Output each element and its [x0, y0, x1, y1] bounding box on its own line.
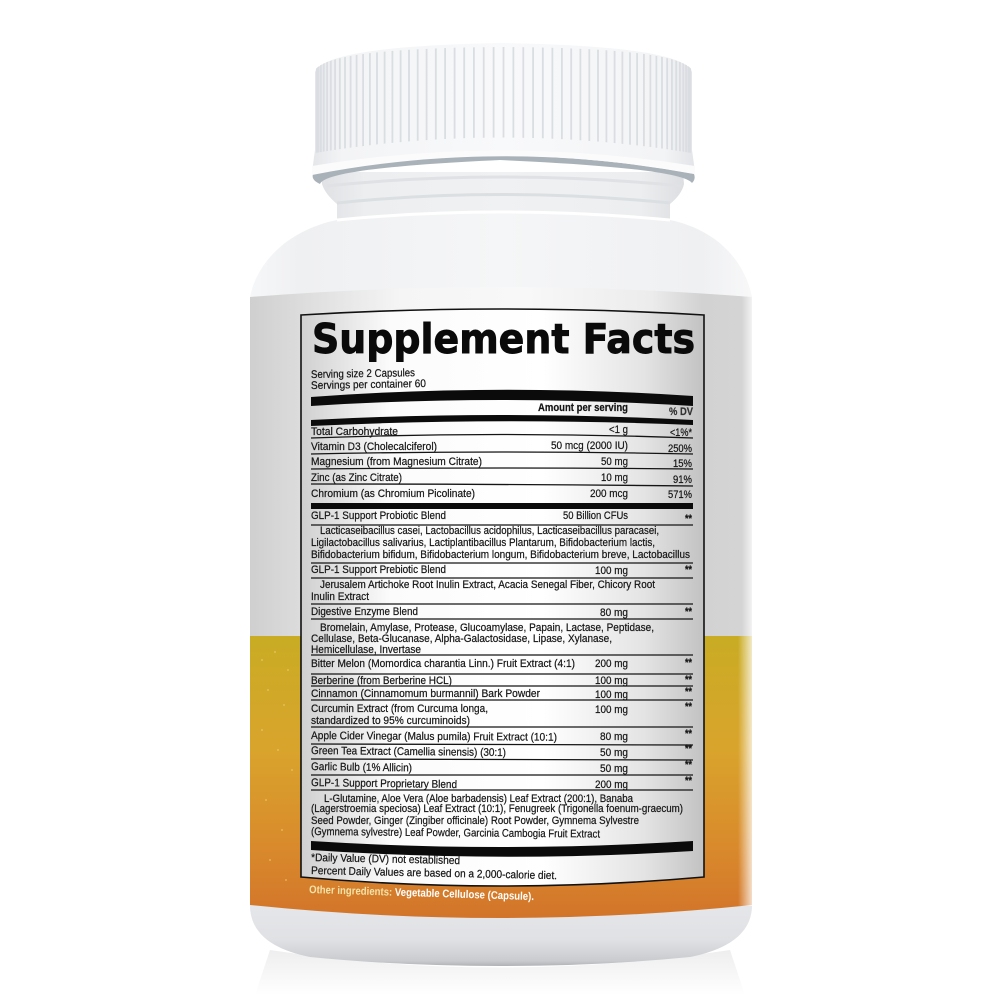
digestive enzyme blend: Cellulase, Beta-Glucanase, Alpha-Galactosidase, Lipase, Xylanase,: [311, 633, 612, 645]
cap lip shadow ring: [313, 156, 695, 184]
nutrient rows: 91%: [673, 474, 692, 486]
proprietary blend: (Lagerstroemia speciosa) Leaf Extract (10:1), Fenugreek (Trigonella foenum-graecum): [311, 803, 683, 815]
extract rows: Garlic Bulb (1% Allicin): [311, 761, 412, 774]
extract rows: Green Tea Extract (Camellia sinensis) (30:1): [311, 745, 506, 759]
footnotes: Percent Daily Values are based on a 2,000-calorie diet.: [311, 865, 557, 882]
nutrient rows: Vitamin D3 (Cholecalciferol): [311, 441, 437, 453]
probiotic blend: GLP-1 Support Probiotic Blend: [311, 510, 446, 522]
prebiotic blend: GLP-1 Support Prebiotic Blend: [311, 564, 446, 576]
reflection under bottle: [255, 950, 745, 995]
other ingredients note: Other ingredients: Vegetable Cellulose (Capsule).: [309, 884, 534, 903]
nutrient rows: [311, 424, 693, 501]
extract rows: 200 mg: [595, 658, 628, 670]
nutrient rows: Zinc (as Zinc Citrate): [311, 472, 402, 484]
extract rows: 100 mg: [595, 689, 628, 701]
thick rules and column headers: [311, 390, 694, 426]
label right edge highlight: [738, 636, 752, 906]
label background: [250, 287, 752, 918]
proprietary blend: (Gymnema sylvestre) Leaf Powder, Garcinia Cambogia Fruit Extract: [311, 826, 600, 841]
probiotic blend: **: [685, 513, 693, 525]
nutrient rows: 50 mcg (2000 IU): [551, 440, 628, 452]
nutrient rows: 571%: [668, 489, 692, 501]
probiotic blend: Lacticaseibacillus casei, Lactobacillus acidophilus, Lacticaseibacillus paracasei,: [320, 525, 659, 537]
extract rows: **: [685, 743, 693, 755]
decorative dots: [261, 651, 293, 881]
nutrient rows: <1 g: [609, 424, 628, 436]
extract rows: **: [685, 657, 693, 669]
bottle cap: [312, 40, 695, 184]
proprietary blend: 200 mg: [595, 779, 628, 791]
serving info: Servings per container 60: [311, 378, 426, 392]
prebiotic blend: Jerusalem Artichoke Root Inulin Extract, Acacia Senegal Fiber, Chicory Root: [320, 579, 655, 591]
probiotic blend: Ligilactobacillus salivarius, Lactiplantibacillus Plantarum, Bifidobacterium lactis,: [311, 537, 655, 549]
extract rows: Bitter Melon (Momordica charantia Linn.) Fruit Extract (4:1): [311, 658, 575, 670]
nutrient rows: Magnesium (from Magnesium Citrate): [311, 456, 482, 468]
extract rows: 50 mg: [600, 763, 628, 775]
nutrient rows: Total Carbohydrate: [311, 426, 398, 438]
digestive enzyme blend: Bromelain, Amylase, Protease, Glucoamylase, Papain, Lactase, Peptidase,: [320, 622, 654, 634]
extract rows: **: [685, 674, 693, 686]
nutrient rows: 250%: [668, 443, 692, 455]
nutrient rows: 50 mg: [601, 456, 628, 468]
extract rows: standardized to 95% curcuminoids): [311, 715, 470, 727]
thick rules and column headers: Amount per serving: [538, 402, 628, 414]
extract rows: Cinnamon (Cinnamomum burmannil) Bark Powder: [311, 688, 540, 700]
proprietary blend: [311, 775, 693, 841]
proprietary blend: Seed Powder, Ginger (Zingiber officinale) Root Powder, Gymnema Sylvestre: [311, 815, 639, 827]
extract rows: [311, 657, 693, 775]
proprietary blend: L-Glutamine, Aloe Vera (Aloe barbadensis) Leaf Extract (200:1), Banaba: [324, 793, 634, 805]
extract rows: **: [685, 728, 693, 740]
footnotes: [311, 852, 557, 882]
proprietary blend: **: [685, 775, 693, 787]
orange gradient band: [250, 636, 752, 918]
prebiotic blend: Inulin Extract: [311, 591, 369, 603]
extract rows: 100 mg: [595, 675, 628, 687]
extract rows: **: [685, 686, 693, 698]
nutrient rows: 15%: [673, 458, 692, 470]
probiotic blend: 50 Billion CFUs: [563, 510, 628, 522]
digestive enzyme blend: 80 mg: [600, 607, 628, 619]
nutrient rows: 200 mcg: [590, 488, 628, 500]
nutrient rows: Chromium (as Chromium Picolinate): [311, 488, 475, 500]
serving info: Serving size 2 Capsules: [311, 367, 415, 381]
digestive enzyme blend: **: [685, 606, 693, 618]
extract rows: 100 mg: [595, 704, 628, 716]
digestive enzyme blend: Digestive Enzyme Blend: [311, 606, 418, 618]
extract rows: Curcumin Extract (from Curcuma longa,: [311, 703, 488, 715]
heading: Supplement Facts: Supplement Facts: [312, 315, 695, 363]
digestive enzyme blend: Hemicellulase, Invertase: [311, 644, 421, 656]
extract rows: Berberine (from Berberine HCL): [311, 675, 452, 687]
proprietary blend: GLP-1 Support Proprietary Blend: [311, 777, 457, 791]
supplement facts panel: [301, 309, 704, 886]
prebiotic blend: **: [685, 564, 693, 576]
probiotic blend: [311, 510, 693, 561]
bottle body: [250, 212, 752, 966]
extract rows: **: [685, 701, 693, 713]
probiotic blend: Bifidobacterium bifidum, Bifidobacterium longum, Bifidobacterium breve, Lactobacillus: [311, 549, 690, 561]
infographic: supplement bottle back label: [250, 44, 752, 974]
footnotes: *Daily Value (DV) not established: [311, 852, 460, 867]
nutrient rows: 10 mg: [601, 472, 628, 484]
thick rules and column headers: % DV: [669, 406, 694, 418]
extract rows: 80 mg: [600, 731, 628, 743]
extract rows: **: [685, 759, 693, 771]
bottle neck: [322, 172, 684, 224]
prebiotic blend: [311, 564, 693, 603]
digestive enzyme blend: [311, 606, 693, 656]
thick divider: [311, 503, 693, 509]
extract rows: Apple Cider Vinegar (Malus pumila) Fruit Extract (10:1): [311, 730, 557, 744]
serving info: [311, 367, 426, 392]
prebiotic blend: 100 mg: [595, 565, 628, 577]
nutrient rows: <1%*: [670, 427, 693, 439]
row rules: [311, 434, 693, 790]
thick curved divider: [311, 841, 693, 857]
extract rows: 50 mg: [600, 747, 628, 759]
